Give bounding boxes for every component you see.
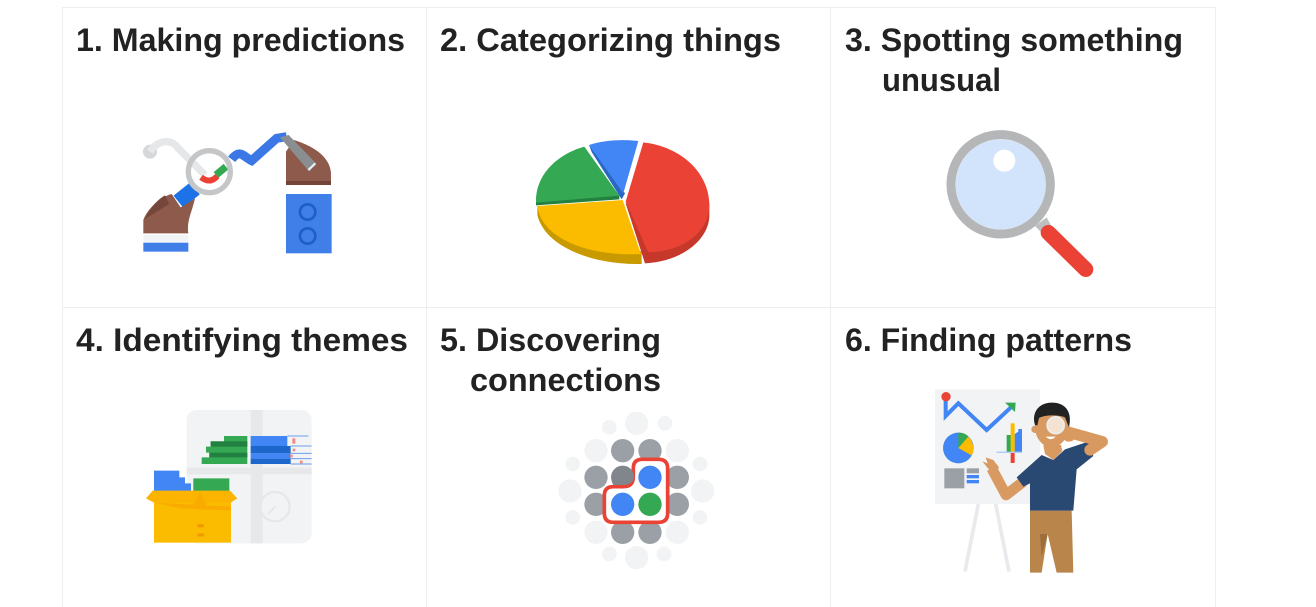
panel: identifying themes	[62, 308, 426, 607]
panel: spotting something unusual	[830, 8, 1216, 308]
heading: 5. Discovering connections: connections	[470, 362, 661, 398]
icon: connected dots	[558, 412, 714, 569]
heading: 5. Discovering connections: 5. Discovering	[440, 322, 661, 358]
panel: categorizing things	[426, 8, 830, 308]
icon: man presenting charts	[935, 389, 1102, 573]
icon: sorted data and box	[146, 410, 312, 543]
heading: 3. Spotting something unusual: 3. Spotting something	[845, 22, 1183, 58]
icon: robot arm with magnifier	[143, 135, 332, 253]
heading: 3. Spotting something unusual: unusual	[882, 62, 1001, 98]
panel: finding patterns	[830, 308, 1216, 607]
icon: magnifying glass	[951, 135, 1086, 269]
panel: discovering connections	[426, 308, 830, 607]
heading: 6. Finding patterns: 6. Finding patterns	[845, 322, 1132, 358]
heading: 2. Categorizing things: 2. Categorizing things	[440, 22, 781, 58]
heading: 1. Making predictions: 1. Making predictions	[76, 22, 405, 58]
heading: 4. Identifying themes: 4. Identifying themes	[76, 322, 408, 358]
icon: 3D pie chart	[536, 140, 709, 264]
panel: making predictions	[62, 8, 426, 308]
